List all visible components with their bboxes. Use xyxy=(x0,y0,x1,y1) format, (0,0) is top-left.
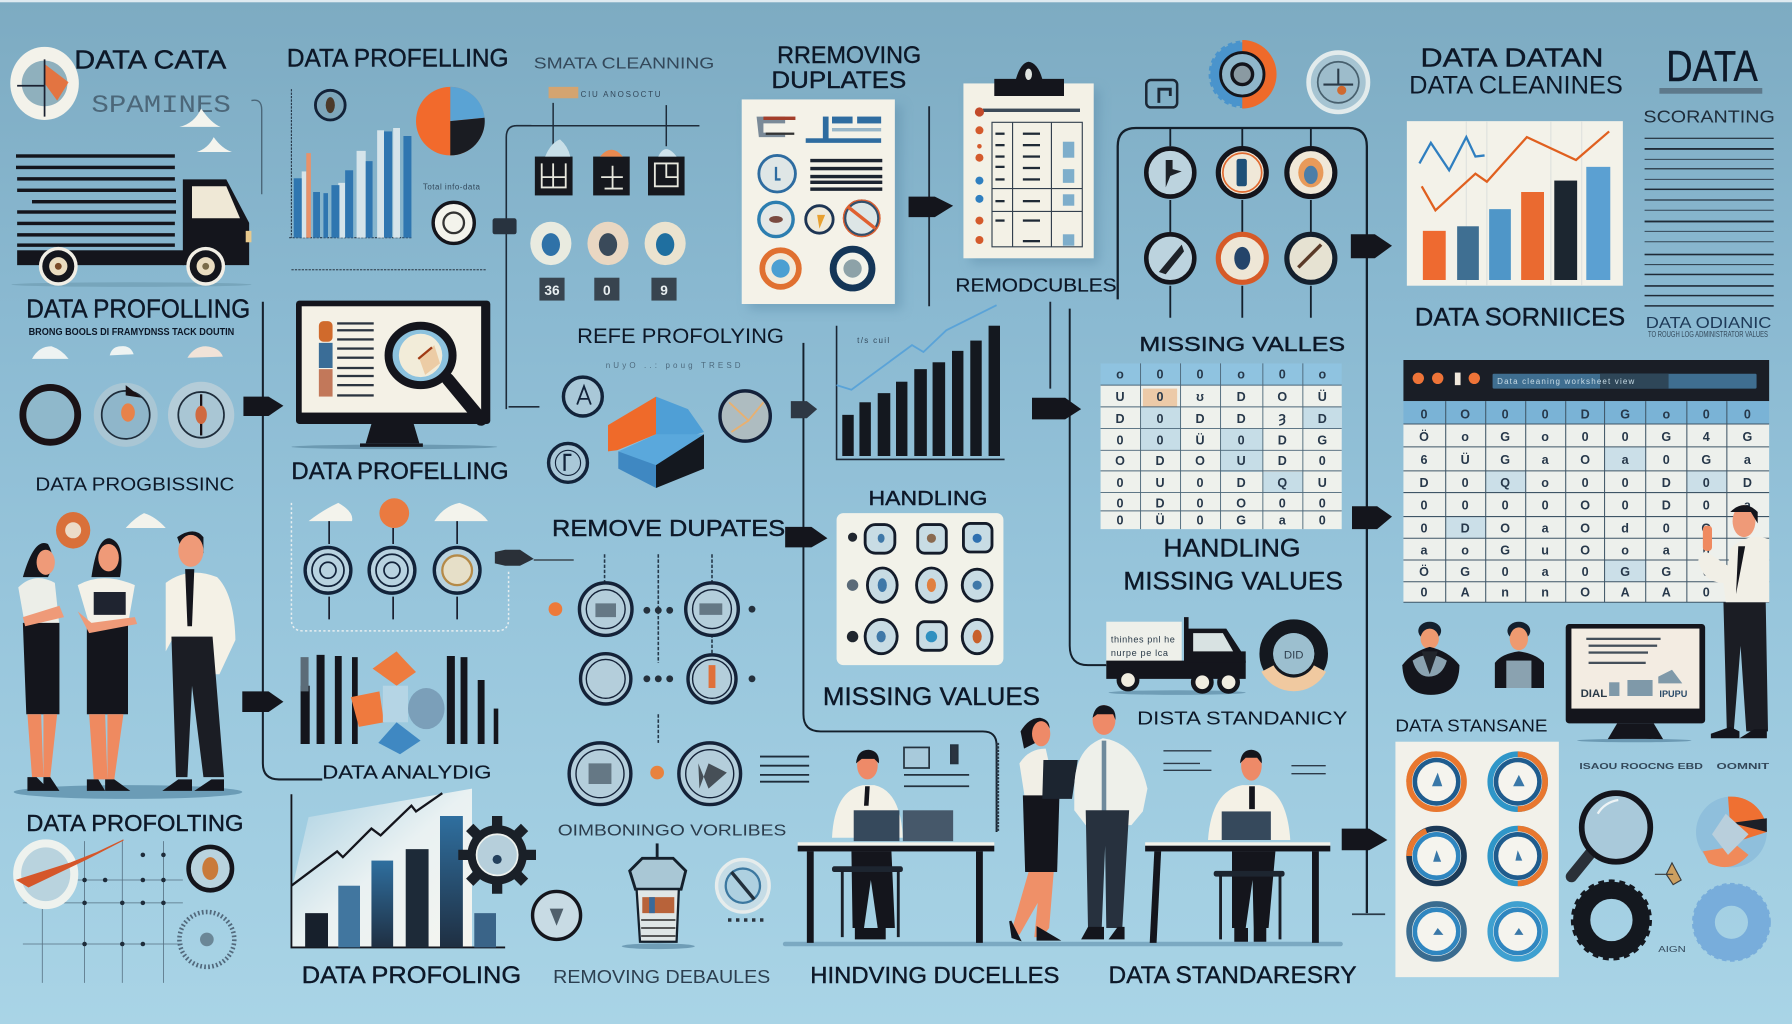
heading: HANDLING xyxy=(869,487,987,510)
icon: ring xyxy=(433,202,474,243)
cell values: 0AnnOAA00 xyxy=(1420,586,1751,600)
heading: MISSING VALUES xyxy=(823,683,1040,711)
chart note: small browser icon xyxy=(904,745,969,786)
square tiles xyxy=(535,157,685,195)
arrow tag xyxy=(791,401,817,418)
heading: HINDVING DUCELLES xyxy=(810,962,1059,988)
dotted scatter: nUyO ..: poug TRESD xyxy=(606,361,741,370)
connector: rounded frame xyxy=(1118,128,1367,913)
caption: Total info-data xyxy=(423,183,481,192)
ring icons: 6 grid xyxy=(1146,128,1335,318)
top icon: dial xyxy=(1309,53,1368,112)
cell values: 0O00DGo00 xyxy=(1420,407,1751,421)
man at table xyxy=(1698,505,1769,738)
arrow tag xyxy=(785,527,827,547)
top icon: bracket xyxy=(1146,80,1177,107)
arrow tag xyxy=(909,197,953,217)
heading: DATA CLEANINES xyxy=(1409,72,1623,100)
man xyxy=(1074,705,1147,939)
icon: gauge xyxy=(720,391,770,441)
arrow tag xyxy=(1351,234,1392,258)
section: data profolling xyxy=(23,294,250,494)
clouds row xyxy=(32,346,223,359)
heading: DATA PROFOLING xyxy=(302,962,521,989)
underline xyxy=(1659,88,1762,94)
top icon: gear xyxy=(1210,40,1277,109)
header row xyxy=(1403,401,1769,424)
icon: blue gear xyxy=(1694,885,1769,960)
heading: DATA PROFELLING xyxy=(287,44,509,72)
heading: DATA DATAN xyxy=(1421,42,1603,72)
panel: data cata truck xyxy=(10,45,251,287)
connector: faint upper xyxy=(251,100,262,194)
garbled subtitle: SPAMINES xyxy=(91,91,231,120)
number tiles: 9 xyxy=(660,283,668,298)
tree lines xyxy=(514,103,699,146)
small notes xyxy=(1163,751,1326,774)
caption: DISTA STANDANICY xyxy=(1137,708,1347,729)
illustration: person at desk two xyxy=(1145,750,1330,943)
caption: DATA SORNIICES xyxy=(1415,305,1625,332)
table: missing values: ODOUD0 xyxy=(1115,454,1326,468)
connector: frame foot xyxy=(1352,913,1385,915)
caption: DATA PROGBISSINC xyxy=(35,473,234,494)
icon: black gear xyxy=(1574,882,1649,958)
icon: 3D pie xyxy=(608,397,704,488)
pie chart xyxy=(416,87,485,155)
circle icons xyxy=(530,222,686,265)
man xyxy=(162,531,235,791)
bar chart: data analyzing xyxy=(301,651,498,754)
icon: orange badge xyxy=(56,512,90,549)
heading: SMATA CLEANNING xyxy=(534,56,714,73)
icon: lighthouse bin xyxy=(622,843,695,949)
tile caps xyxy=(545,139,677,157)
connector: table left upper xyxy=(1049,302,1051,389)
icon: cloud xyxy=(126,513,166,528)
heading: DATA PROFOLTING xyxy=(26,810,243,836)
tiny captions: OOMNIT xyxy=(1717,762,1769,771)
connector line xyxy=(928,106,930,306)
section: data cleanines right xyxy=(1407,42,1775,339)
cell values: ÖoGo00G4G xyxy=(1419,429,1752,444)
woman one xyxy=(18,543,64,791)
dashed vertical xyxy=(996,743,999,832)
panel: ring gauges xyxy=(1395,742,1559,977)
heading: RREMOVING xyxy=(777,42,921,69)
donut chart: DID xyxy=(1284,649,1304,661)
app window: big data table xyxy=(1403,360,1769,602)
table: missing values: 0U0DQU xyxy=(1116,476,1327,490)
tiny captions: ISAOU ROOCNG EBD xyxy=(1579,762,1703,771)
panel: rising bars and gear xyxy=(291,789,581,947)
caption: REMODCUBLES xyxy=(955,274,1117,295)
connector: left vertical xyxy=(263,302,322,779)
ring grid xyxy=(549,554,755,805)
icon: bust two xyxy=(1495,622,1544,688)
tag xyxy=(495,550,534,566)
small note: CIU ANOSOCTU xyxy=(581,90,661,99)
panel: data profelling chart xyxy=(287,44,509,270)
orange smudge note xyxy=(549,87,578,98)
icon: small circle xyxy=(315,90,345,120)
heading: DATA PROFOLLING xyxy=(26,294,250,324)
cell values: 0DOaOd0O0 xyxy=(1420,522,1751,536)
illustration: small truck: nurpe pe lca xyxy=(1111,648,1169,658)
heading: REMOVE DUPATES xyxy=(552,515,785,541)
illustration: couple xyxy=(1010,705,1147,939)
bar chart xyxy=(289,89,413,238)
chart: growth bars xyxy=(837,305,1005,459)
monitor: report: DIAL xyxy=(1581,688,1607,700)
tag xyxy=(493,218,517,234)
caption: DATA ANALYDIG xyxy=(322,761,491,782)
heading: MISSING VALUES xyxy=(1123,568,1343,596)
title bar xyxy=(1403,360,1769,401)
section: remove duplicates rings xyxy=(549,515,809,839)
monitor: report xyxy=(1566,624,1705,742)
illustration: small truck: thinhes pnl he xyxy=(1111,634,1175,644)
dotted rule xyxy=(291,269,486,271)
heading: REMOVING DEBAULES xyxy=(553,966,770,987)
heading: MISSING VALLES xyxy=(1139,333,1345,356)
icon: ring xyxy=(563,377,602,416)
woman two xyxy=(78,538,137,791)
section: removing duplicates xyxy=(742,42,921,310)
panel: clipboard table xyxy=(963,62,1099,264)
panel: monitor with magnifier xyxy=(291,301,497,449)
section: remove profiling xyxy=(549,323,784,488)
people: three colleagues xyxy=(14,512,242,799)
icon: dial xyxy=(717,859,769,920)
panel: line and bar chart xyxy=(1407,121,1623,286)
title bar: Data cleaning worksheet view xyxy=(1497,377,1635,386)
table: missing values: D0DDȜD xyxy=(1115,412,1327,426)
icon: truck xyxy=(11,154,251,287)
connector: table left xyxy=(1070,309,1106,665)
icon: clouds xyxy=(179,109,232,152)
number tiles: 36 xyxy=(544,283,560,298)
heading: DATA STANDARESRY xyxy=(1109,962,1357,989)
panel: report sheet xyxy=(742,99,902,310)
cell values: ÖG0a0GG00 xyxy=(1419,564,1751,579)
arrow tag xyxy=(242,691,283,712)
side lines xyxy=(760,757,809,782)
arrow tag xyxy=(1352,506,1392,529)
small caption: AIGN xyxy=(1658,945,1686,954)
caption: DATA ODIANIC xyxy=(1646,315,1771,332)
icon: ring xyxy=(549,443,587,482)
section: data cleaning icons xyxy=(514,56,714,301)
cell values: 6ÜGaOa0Ga xyxy=(1420,452,1752,467)
icon: ring xyxy=(533,891,581,939)
icon: pie xyxy=(1696,797,1767,867)
arrow tag xyxy=(1032,398,1081,419)
number tiles: 0 xyxy=(603,283,611,298)
caption: OIMBONINGO VORLIBES xyxy=(558,822,786,839)
table: missing values: 0Ü0Ga0 xyxy=(1116,513,1326,528)
table: missing values: o00o0o xyxy=(1116,367,1326,381)
text lines xyxy=(1645,138,1774,307)
panel: plot with ring and gauge xyxy=(17,840,234,983)
tiny captions xyxy=(1579,762,1769,771)
icon: gear xyxy=(458,816,536,894)
heading: data cata: DATA CATA xyxy=(74,45,227,75)
table: missing values: 00Ü0DG xyxy=(1116,433,1327,448)
ring icons xyxy=(23,382,234,448)
cell values: D0Qo00D0D xyxy=(1419,476,1752,490)
cell values: 0000O0D0a xyxy=(1420,499,1752,513)
monitor: report: IPUPU xyxy=(1659,689,1688,699)
table: missing values xyxy=(1101,363,1342,529)
small marker xyxy=(1655,863,1681,885)
panel: missing values grid xyxy=(837,513,1003,665)
grid xyxy=(1403,401,1769,602)
heading: data: DATA xyxy=(1666,43,1758,91)
cell values xyxy=(1419,407,1752,600)
tinted cells xyxy=(1446,447,1727,582)
icon: bust one xyxy=(1402,622,1459,695)
caption: DATA STANSANE xyxy=(1395,715,1547,735)
illustration: small truck xyxy=(1106,617,1246,695)
heading: HANDLING xyxy=(1163,535,1301,563)
tag line xyxy=(534,559,574,561)
number tiles xyxy=(539,278,677,301)
woman xyxy=(1010,718,1078,939)
subtitle: BRONG BOOLS DI FRAMYDNSS TACK DOUTIN xyxy=(29,327,234,338)
connector: col 2 right xyxy=(506,126,539,409)
ground shadow xyxy=(783,942,1343,946)
cell values: aoGuOoa00 xyxy=(1420,543,1751,557)
connector: middle vertical xyxy=(803,343,997,832)
chart label: t/s cuil xyxy=(857,336,889,345)
icon: magnifier xyxy=(1571,793,1650,877)
panel: dashed ring group xyxy=(291,498,509,631)
arrow tag xyxy=(1342,829,1387,850)
subtitle: SCORANTING xyxy=(1643,106,1775,126)
heading: DATA PROFELLING xyxy=(291,458,509,485)
heading: DUPLATES xyxy=(771,67,906,94)
arrow tag xyxy=(243,397,283,416)
table: missing values: 0D0O00 xyxy=(1116,496,1326,510)
cells xyxy=(1403,424,1769,602)
illustration: person at desk one xyxy=(798,750,994,943)
heading: REFE PROFOLYING xyxy=(577,323,784,348)
table: missing values: U0ʊDOÜ xyxy=(1115,389,1327,404)
donut chart xyxy=(1266,626,1321,684)
top edge xyxy=(0,0,1792,2)
icon: clock badge xyxy=(10,47,79,120)
